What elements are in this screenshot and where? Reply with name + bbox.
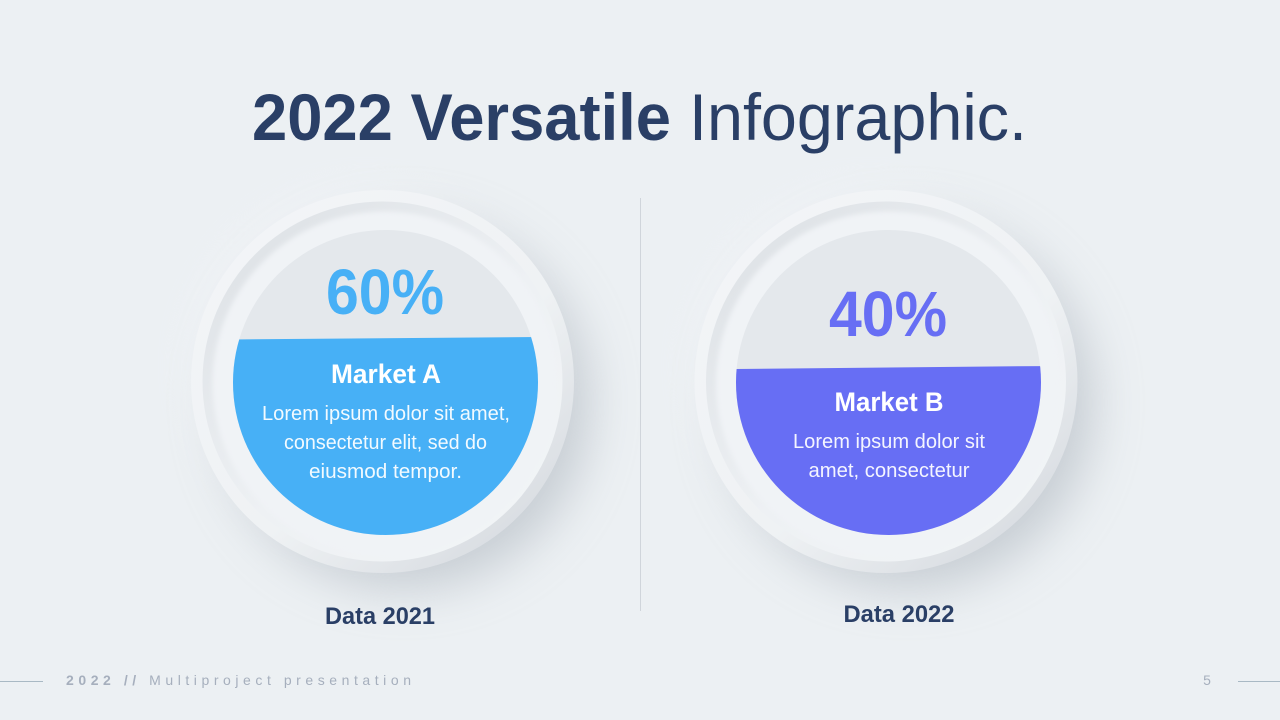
description: Market B: amet, consectetur xyxy=(808,460,970,482)
percent: 60%: 60% xyxy=(326,256,444,328)
description: Market A: consectetur elit, sed do xyxy=(284,432,487,454)
label: Market A: Market A xyxy=(331,359,441,389)
caption: Data 2021: Data 2021 xyxy=(325,603,435,630)
segment: Market B fill xyxy=(730,366,1048,540)
description: Market A: eiusmod tempor. xyxy=(309,461,462,483)
title: 2022 Versatile xyxy=(252,80,671,154)
panel: Market A gauge xyxy=(180,179,590,589)
footer: page number: 5 xyxy=(1203,672,1211,688)
caption: Data 2022: Data 2022 xyxy=(844,601,954,628)
footer: left rule xyxy=(0,681,43,682)
title xyxy=(252,80,1027,154)
footer: presentation text: 2022 // Multiproject presentation xyxy=(66,672,411,688)
description: Market A xyxy=(262,403,510,483)
footer: right rule xyxy=(1238,681,1280,682)
description: Market A: Lorem ipsum dolor sit amet, xyxy=(262,403,510,425)
percent: 40%: 40% xyxy=(829,278,947,350)
description: Market B xyxy=(793,431,985,482)
segment: Market A fill xyxy=(225,337,545,540)
description: Market B: Lorem ipsum dolor sit xyxy=(793,431,985,453)
label: Market B: Market B xyxy=(834,387,944,417)
title: Infographic. xyxy=(689,80,1027,154)
center divider xyxy=(640,198,641,611)
panel: Market B gauge xyxy=(684,179,1094,589)
